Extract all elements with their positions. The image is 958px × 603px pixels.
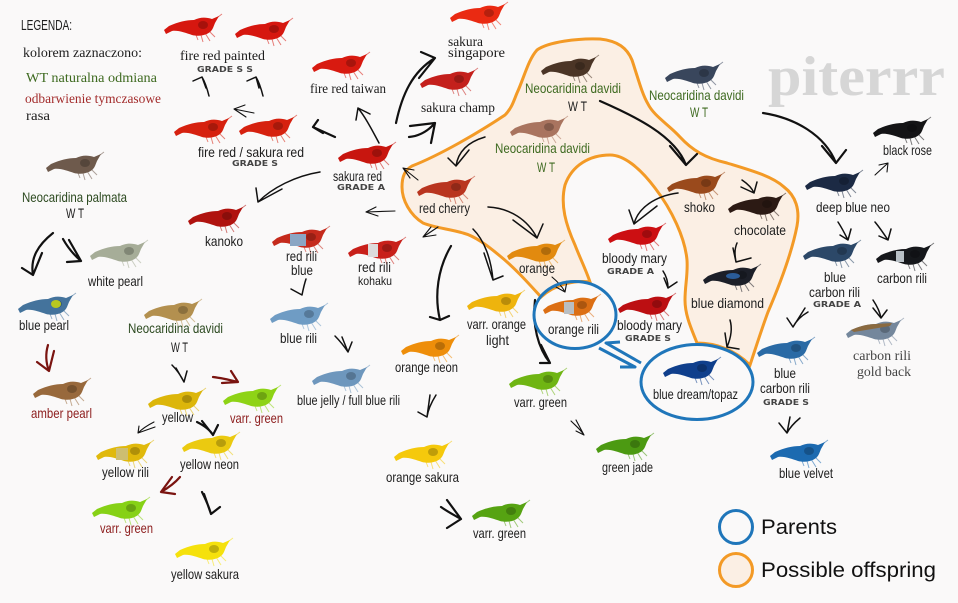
label line: gold back: gold back <box>857 365 911 380</box>
specimen: Neocaridina davidi golden <box>128 299 223 355</box>
icon: sakura red shrimp <box>338 142 396 170</box>
specimen: red rili kohaku <box>348 237 406 288</box>
arrow: yellow to varr. green discoloration <box>213 371 238 383</box>
specimen: blue rili <box>270 303 328 346</box>
label: deep blue neo: deep blue neo <box>816 199 890 215</box>
icon: orange rili shrimp <box>543 294 601 322</box>
legend item: temporary discoloration: odbarwienie tymczasowe <box>25 92 161 107</box>
specimen: blue dream/topaz (parent) <box>653 357 738 402</box>
arrow: double cross between parents <box>599 342 641 367</box>
icon: black rose shrimp <box>873 117 931 145</box>
icon: red rili kohaku shrimp <box>348 237 406 265</box>
icon: wild dark blue shrimp <box>665 62 723 90</box>
specimen: varr. green lower <box>92 497 153 536</box>
label line: red rili: red rili <box>358 259 391 275</box>
label: white pearl: white pearl <box>87 273 143 289</box>
key swatch: possible offspring <box>720 554 752 586</box>
specimen: kanoko <box>188 205 246 249</box>
specimen: sakura red <box>333 142 396 192</box>
icon: blue jelly shrimp <box>312 365 370 393</box>
specimen: white pearl <box>87 240 148 289</box>
grade: A: GRADE A <box>607 267 655 276</box>
icon: orange neon shrimp <box>401 335 459 363</box>
label line: blue: blue <box>291 262 313 278</box>
specimen: red cherry <box>417 176 475 216</box>
arrow: bloody mary A to S <box>663 271 677 288</box>
label: yellow neon: yellow neon <box>180 456 239 472</box>
label: WT: W T <box>66 205 84 221</box>
label: orange rili: orange rili <box>548 321 599 337</box>
icon: yellow sakura shrimp <box>175 538 233 566</box>
specimen: blue diamond <box>691 264 764 311</box>
icon: sakura champ shrimp <box>420 68 478 96</box>
icon: wild pale brown shrimp <box>510 116 568 144</box>
specimen: orange sakura <box>386 441 459 485</box>
specimen: fire red / sakura red <box>174 115 304 168</box>
specimen: blue jelly / full blue rili <box>297 365 400 408</box>
arrow: sakura red to sakura singapore <box>396 52 435 123</box>
icon: blue pearl shrimp <box>18 293 76 321</box>
arrow: deep blue to carbon rili <box>875 222 891 240</box>
arrow: pair to left <box>234 105 254 117</box>
icon: white pearl shrimp <box>90 240 148 268</box>
key label: possible offspring: Possible offspring <box>761 559 936 582</box>
arrow: amber discoloration <box>37 345 54 371</box>
label: varr. green: varr. green <box>100 520 153 536</box>
label: amber pearl: amber pearl <box>31 405 92 421</box>
specimen: Neocaridina davidi blue-black <box>649 62 744 120</box>
label line: blue: blue <box>824 269 846 285</box>
icon: carbon rili gold back shrimp <box>846 318 904 346</box>
label line: red rili: red rili <box>286 248 317 264</box>
label: bloody mary: bloody mary <box>617 317 682 333</box>
icon: varr. green shrimp <box>472 500 530 528</box>
icon: fire red shrimp <box>174 116 232 144</box>
label: yellow: yellow <box>162 409 194 425</box>
arrow: red cherry to orange neon <box>430 246 451 320</box>
arrow: blue diamond to blue dream <box>725 320 739 349</box>
label: orange neon: orange neon <box>395 359 458 375</box>
key swatch: parents <box>720 510 752 544</box>
parent ring: blue dream/topaz <box>641 344 753 420</box>
arrow: deep blue to black rose <box>875 163 888 175</box>
specimen: Neocaridina davidi pale brown <box>495 116 590 175</box>
label: chocolate: chocolate <box>734 222 786 238</box>
label: yellow rili: yellow rili <box>102 464 149 480</box>
label: orange sakura: orange sakura <box>386 469 459 485</box>
arrow: fire red to painted right <box>247 77 263 96</box>
label: blue pearl: blue pearl <box>19 317 69 333</box>
specimen: shoko <box>667 172 725 215</box>
label: yellow sakura: yellow sakura <box>171 566 239 582</box>
icon: blue dream shrimp <box>663 357 721 385</box>
label line: light: light <box>486 332 509 348</box>
specimen: fire red painted <box>164 14 293 74</box>
label line: varr. orange: varr. orange <box>467 316 526 332</box>
label line: carbon rili: carbon rili <box>809 284 860 300</box>
specimen: orange rili (parent) <box>543 294 601 337</box>
arrow: Neocaridina davidi to deep blue neo <box>763 113 846 163</box>
legend text block <box>21 17 161 124</box>
icon: blue carbon rili shrimp <box>803 240 861 268</box>
specimen: fire red taiwan <box>310 52 386 97</box>
specimen: green jade <box>596 433 654 475</box>
label: WT: W T <box>568 98 587 114</box>
icon: red rili blue shrimp <box>272 226 330 254</box>
icon: orange sakura shrimp <box>394 441 452 469</box>
icon: varr. orange light shrimp <box>467 290 525 318</box>
arrow: shoko to bloody mary <box>629 193 678 224</box>
label: carbon rili: carbon rili <box>877 270 927 286</box>
label line: blue: blue <box>774 365 796 381</box>
specimen: varr. orange light <box>467 290 526 348</box>
arrow: Neocaridina davidi to shoko <box>600 101 697 165</box>
specimen: bloody mary grade A <box>602 223 667 276</box>
icon: fire red taiwan shrimp <box>312 52 370 80</box>
specimen: orange neon <box>395 335 459 375</box>
icon: bloody mary shrimp <box>618 293 676 321</box>
specimen: Neocaridina palmata <box>22 152 127 221</box>
arrow: deep blue to blue carbon rili <box>838 222 851 240</box>
arrow: sakura red to fire red taiwan <box>356 108 379 143</box>
specimen: varr. green upper <box>223 385 283 426</box>
specimen: Neocaridina davidi top <box>525 55 621 114</box>
icon: yellow neon shrimp <box>182 432 240 460</box>
label: blue jelly / full blue rili: blue jelly / full blue rili <box>297 392 400 408</box>
region: possible offspring outline <box>402 39 798 365</box>
label: WT: W T <box>690 104 708 120</box>
label: Neocaridina palmata: Neocaridina palmata <box>22 189 127 205</box>
specimen: deep blue neo <box>805 170 890 215</box>
arrow: red rili blue to blue rili <box>291 279 306 295</box>
arrow: red cherry to sakura red <box>403 168 418 180</box>
label: kanoko: kanoko <box>205 233 243 249</box>
watermark: piterrr: piterrr <box>768 46 945 108</box>
arrow: red cherry left to kanoko side <box>366 207 395 216</box>
specimen: yellow sakura <box>171 538 239 582</box>
label: sakura champ: sakura champ <box>421 101 495 116</box>
legend item: breed: rasa <box>26 109 51 124</box>
arrow: sakura red to sakura champ <box>409 123 435 143</box>
specimen: carbon rili <box>876 243 934 286</box>
arrow: yellow to yellow rili <box>138 422 155 433</box>
specimen: amber pearl <box>31 378 92 421</box>
arrow: sakura red to kanoko <box>256 172 320 202</box>
icon: palmata shrimp <box>46 152 104 180</box>
specimen: black rose <box>873 117 932 158</box>
icon: sakura singapore shrimp <box>450 2 508 30</box>
icon: kanoko shrimp <box>188 205 246 233</box>
label: shoko: shoko <box>684 199 715 215</box>
label: varr. green: varr. green <box>514 394 567 410</box>
parent ring: orange rili <box>534 282 616 348</box>
icon: carbon rili shrimp <box>876 243 934 271</box>
label line: carbon rili: carbon rili <box>853 349 911 364</box>
specimen: chocolate <box>728 193 786 238</box>
arrow: blue carbon S to blue velvet <box>779 417 800 433</box>
specimen: sakura singapore <box>448 2 508 61</box>
label: Neocaridina davidi: Neocaridina davidi <box>525 80 621 96</box>
label: blue dream/topaz: blue dream/topaz <box>653 386 738 402</box>
specimen: carbon rili gold back <box>846 318 911 380</box>
label: blue diamond: blue diamond <box>691 295 764 311</box>
label: Neocaridina davidi: Neocaridina davidi <box>495 140 590 156</box>
chart key: parents and possible offspring <box>720 510 936 586</box>
specimen: yellow rili <box>96 440 154 480</box>
grade: S: GRADE S <box>232 159 278 168</box>
arrow: yellow neon to varr. green discoloration <box>161 477 180 494</box>
icon: shoko shrimp <box>667 172 725 200</box>
specimen: yellow <box>148 388 206 425</box>
specimen: blue carbon rili grade A <box>803 240 862 309</box>
arrow: golden davidi to yellow <box>172 365 187 382</box>
legend heading: LEGENDA: <box>21 17 72 34</box>
label line: singapore: singapore <box>448 46 505 61</box>
icon: sakura red shrimp <box>239 115 297 143</box>
grade: S: GRADE S <box>763 398 809 407</box>
icon: blue diamond shrimp <box>703 264 761 292</box>
legend subtitle: kolorem zaznaczono: <box>23 46 142 61</box>
label line: carbon rili: carbon rili <box>760 380 810 396</box>
label: fire red taiwan: fire red taiwan <box>310 82 386 97</box>
grade: A: GRADE A <box>813 300 862 309</box>
icon: yellow rili shrimp <box>96 440 154 468</box>
specimen: red rili blue <box>272 226 330 278</box>
arrow: yellow to yellow neon <box>197 421 218 435</box>
arrow: red cherry to varr. orange <box>473 229 503 280</box>
arrow: orange sakura to varr. green <box>441 500 461 528</box>
icon: green jade shrimp <box>596 433 654 461</box>
specimen: blue velvet <box>770 440 833 481</box>
label: Neocaridina davidi: Neocaridina davidi <box>649 87 744 103</box>
label: varr. green: varr. green <box>230 410 283 426</box>
label: sakura red: sakura red <box>333 168 382 184</box>
label: fire red painted: fire red painted <box>180 49 265 64</box>
label line: kohaku: kohaku <box>358 274 392 288</box>
icon: blue carbon rili shrimp <box>757 337 815 365</box>
label: black rose: black rose <box>883 142 932 158</box>
arrow: yellow neon to yellow sakura <box>202 492 220 514</box>
arrow: palmata to blue pearl <box>22 233 53 275</box>
grade: S: GRADE S <box>625 334 671 343</box>
arrow: orange to orange rili <box>552 277 567 292</box>
icon: fire red painted shrimp 1 <box>164 14 222 42</box>
icon: orange shrimp <box>507 240 565 268</box>
label: green jade: green jade <box>602 459 653 475</box>
arrow: sakura red to fire red <box>313 120 335 137</box>
label line: sakura: sakura <box>448 35 484 50</box>
icon: amber pearl shrimp <box>33 378 91 406</box>
label: orange: orange <box>519 260 555 276</box>
label: fire red / sakura red: fire red / sakura red <box>198 144 304 160</box>
arrow: pale davidi to red cherry <box>448 137 485 166</box>
specimen: blue pearl <box>18 293 76 333</box>
icon: varr. green shrimp <box>92 497 150 525</box>
arrow: fire red to painted left <box>193 77 209 96</box>
icon: varr. green shrimp <box>509 368 567 396</box>
icon: deep blue neo shrimp <box>805 170 863 198</box>
specimen: bloody mary grade S <box>617 293 682 343</box>
icon: fire red painted shrimp 2 <box>235 18 293 46</box>
label: blue rili: blue rili <box>280 330 317 346</box>
icon: bloody mary shrimp <box>608 223 666 251</box>
label: bloody mary: bloody mary <box>602 250 667 266</box>
icon: wild brown shrimp <box>541 55 599 83</box>
arrow: palmata to white pearl <box>63 239 81 262</box>
specimen: varr. green right <box>472 500 530 541</box>
grade: S S: GRADE S S <box>197 65 253 74</box>
specimen: sakura champ <box>420 68 495 116</box>
grade: A: GRADE A <box>337 183 386 192</box>
icon: red cherry shrimp <box>417 176 475 204</box>
label: WT: W T <box>537 159 555 175</box>
label: red cherry: red cherry <box>419 200 470 216</box>
label: Neocaridina davidi: Neocaridina davidi <box>128 320 223 336</box>
arrow: blue rili to blue jelly <box>335 336 352 352</box>
icon: wild golden brown shrimp <box>144 299 202 327</box>
arrow: shoko to chocolate <box>741 180 757 193</box>
icon: blue velvet shrimp <box>770 440 828 468</box>
legend item: natural variety: WT naturalna odmiana <box>26 71 158 86</box>
label: varr. green: varr. green <box>473 525 526 541</box>
arrow: blue carbon A to S <box>787 308 808 327</box>
arrow: blue carbon A to gold back <box>873 300 887 318</box>
arrow: orange neon to orange sakura <box>418 395 436 417</box>
specimen: yellow neon <box>180 432 240 472</box>
key label: parents: Parents <box>761 516 837 539</box>
arrow: red cherry to red rili <box>423 227 438 237</box>
specimen: varr. green middle <box>509 368 567 410</box>
arrow: orange rili side to varr. green <box>534 300 550 363</box>
arrow: chocolate to blue diamond <box>733 243 751 262</box>
icon: blue rili shrimp <box>270 303 328 331</box>
label: WT: W T <box>171 339 188 355</box>
label: blue velvet: blue velvet <box>779 465 833 481</box>
icon: yellow shrimp <box>148 388 206 416</box>
arrow: red cherry to orange <box>488 207 543 238</box>
specimen: blue carbon rili grade S <box>757 337 815 407</box>
specimen: orange <box>507 240 565 276</box>
icon: chocolate shrimp <box>728 193 786 221</box>
arrow: varr. green to green jade <box>571 420 584 435</box>
icon: varr. green shrimp <box>223 385 281 413</box>
